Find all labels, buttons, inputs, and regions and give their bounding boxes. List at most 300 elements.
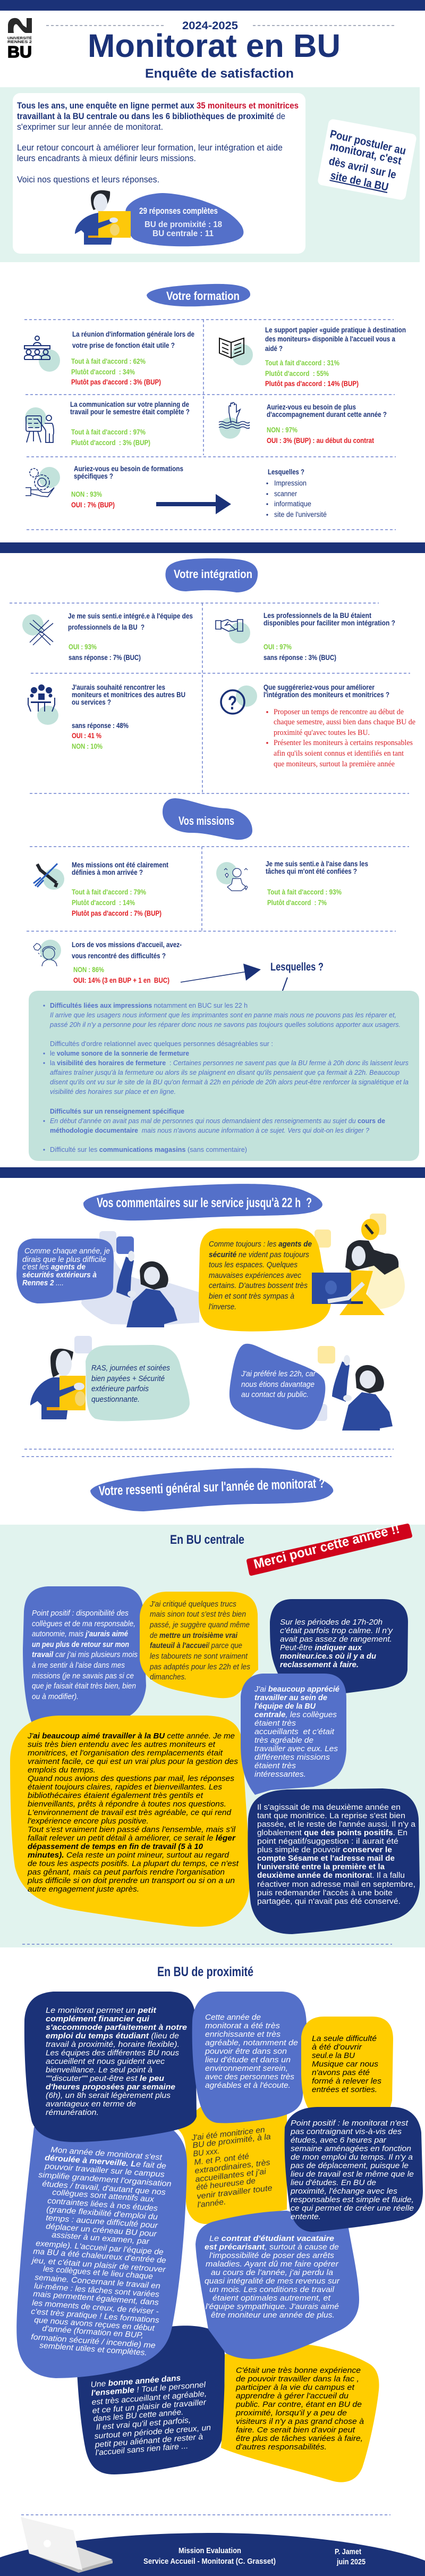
logo: Université Rennes 2 BU: RENNES 2 xyxy=(7,39,32,44)
question: à l'aise dans les tâches: Tout à fait d'accord : 93% xyxy=(267,888,342,896)
question: support papier: Tout à fait d'accord : 31% xyxy=(265,359,339,367)
question: rencontrer les autres moniteurs: J'aurais souhaité rencontrer les xyxy=(72,683,165,691)
comment: périodes 17h-20h: Sur les périodes de 17h-20h xyxy=(280,1618,382,1627)
comment: deuxième année: globalement que des points positifs . En xyxy=(257,1828,407,1837)
comment: très bonne expérience (yellow): proximité, lorsqu'il y a peu de xyxy=(235,2408,347,2418)
comment: BU xxx (yellow, tilted): BU de proximité, à la xyxy=(192,2132,271,2150)
comment: contrat précarisant (blue): étaient optimales autrement, et xyxy=(212,2294,331,2303)
comment: année à merveille (blue, tilted): les collègues et le lieu chaque xyxy=(43,2264,153,2281)
arrow: down to difficulties panel xyxy=(277,977,287,997)
illustration: man holding a yellow sheet xyxy=(30,1349,86,1419)
list: Lesquelles: Lesquelles ? xyxy=(268,468,304,476)
question: réunion d'information xyxy=(24,330,194,386)
comment: security agents (blue) xyxy=(16,1236,199,1327)
section heading: Votre intégration xyxy=(165,558,258,592)
section heading: Vos missions xyxy=(163,798,252,840)
comment: année à merveille (blue, tilted): lui-même : les tâches sont variées xyxy=(34,2281,160,2299)
question: accompagnement: OUI : 3% (BUP) : au début du contrat xyxy=(267,437,374,445)
icon: presenter at a board xyxy=(25,407,54,442)
question: suggestions: chaque semestre, aussi bien dans chaque BU de xyxy=(274,718,415,726)
comment: équipe de la BU centrale: étaient très xyxy=(254,1719,296,1728)
banner: Merci pour cette année: Merci pour cette année !! xyxy=(252,1521,401,1572)
comment: complément financier (navy): accueillent et nous guident avec xyxy=(46,2057,165,2066)
comment: année à merveille (blue, tilted): (grande flexibilité d'emploi du xyxy=(46,2205,158,2222)
comment: très bonne expérience (yellow): public. Par contre, étant en BU de xyxy=(235,2400,362,2409)
comment: année à merveille (blue, tilted): jeu, et c'était un plaisir de retrouver xyxy=(31,2256,166,2274)
comment: année à merveille (blue, tilted): assister à un examen, par xyxy=(52,2230,150,2246)
list: Lesquelles: scanner xyxy=(274,490,297,498)
question: missions définies: Plutôt d'accord : 14% xyxy=(72,899,135,907)
logo: Université Rennes 2 BU: BU xyxy=(7,43,32,61)
question: suggestions xyxy=(221,683,415,768)
icon: stacked hands xyxy=(22,614,53,645)
comment: contrat précarisant (blue): est précarisant , surtout à cause de xyxy=(205,2243,339,2252)
comment: bonne année dans l'ensemble (navy, tilted): est très accueillant et agréable, xyxy=(91,2389,207,2407)
comment: très bonne expérience (yellow): apprendre à gérer l'accueil du xyxy=(236,2391,349,2401)
comment: ouvrir seul.e la BU Musique (yellow): entrées et sorties. xyxy=(312,2085,377,2094)
comment: ouvrir seul.e la BU Musique (yellow): La seule difficulté xyxy=(312,2034,377,2043)
comment: complément financier (navy): complément financier qui xyxy=(46,2014,150,2023)
comment: très bonne expérience (yellow): de pouvoir travailler dans la fac , xyxy=(236,2374,359,2383)
comment: RAS (teal): extérieure parfois xyxy=(91,1385,149,1393)
comment: BU xxx (yellow, tilted): M. et P. ont été xyxy=(194,2152,250,2167)
comment: année à merveille (blue, tilted): semaine. Concernant le travail en xyxy=(35,2273,160,2291)
comment: troisième fauteuil: dimanches. xyxy=(150,1673,186,1682)
top bar xyxy=(0,0,425,11)
illustration: man holding a yellow sheet xyxy=(75,190,131,245)
panel: difficulties list: Difficultés d'ordre relationnel avec quelques personnes désagréables sur : xyxy=(50,1040,273,1048)
comment: disponibilité des collègues: Point positif : disponibilité des xyxy=(32,1609,129,1618)
comment: bonne année dans l'ensemble (navy, tilted): et ce fut un plaisir de travailler xyxy=(92,2398,207,2415)
comment: année enrichissante (blue): Cette année de xyxy=(205,2013,261,2022)
comment: deuxième année: l'université entre la première et la xyxy=(257,1862,385,1871)
question: à l'aise dans les tâches: Plutôt d'accord : 7% xyxy=(267,899,327,907)
comment: troisième fauteuil: passé, je suggère quand même xyxy=(149,1621,250,1629)
comment: périodes 17h-20h: Peut-être indiquer aux xyxy=(280,1643,362,1652)
illustration: waving woman xyxy=(332,1355,393,1431)
comment: équipe de la BU centrale xyxy=(241,1674,346,1795)
comment: disponibilité des collègues: à me sentir à l'aise dans mes xyxy=(32,1661,125,1670)
panel: difficulties list: En début d'année on avait pas mal de personnes qui nous demandaient des renseignements au sujet du cours de xyxy=(50,1117,385,1125)
section heading: Vos commentaires xyxy=(83,1184,322,1220)
panel: difficulties list: méthodologie documentaire mais nous n'avons aucune information à ce sujet. Vers qui doit-on les diriger ? xyxy=(50,1127,369,1134)
comment: année à merveille (blue, tilted) xyxy=(16,2127,187,2378)
question: missions définies: Mes missions ont été clairement xyxy=(72,861,168,869)
decorative squares around comments xyxy=(74,1214,386,1421)
comment: contrat précarisant (blue): quasi intégralité de mes revenus sur xyxy=(205,2277,340,2286)
comment: contrat précarisant (blue): l'impossibilité de poser des arrêts xyxy=(209,2251,335,2260)
section divider bar xyxy=(0,542,425,553)
intro text: travaillant à la BU centrale ou dans les 6 bibliothèques de proximité de xyxy=(17,111,285,121)
icon: raised hand above waves xyxy=(219,403,250,439)
question: missions définies: Plutôt pas d'accord : 7% (BUP) xyxy=(72,909,162,917)
question: communication planning: Tout à fait d'accord : 97% xyxy=(71,428,146,436)
question: rencontrer les autres moniteurs: ou services ? xyxy=(72,698,111,706)
subtitle: Enquête de satisfaction xyxy=(145,66,294,81)
question: intégration équipe: sans réponse : 7% (BUC) xyxy=(69,654,141,662)
question: communication planning xyxy=(25,400,190,447)
comment: J'ai beaucoup aimé travailler à la BU: plus difficile si on doit prendre un transport ou si on a un xyxy=(27,1876,235,1885)
question: support papier: Plutôt d'accord : 55% xyxy=(265,370,329,378)
arrow: towards Lesquelles xyxy=(181,964,261,982)
comment: security agents (yellow): Comme toujours : les agents de xyxy=(209,1240,312,1249)
question: réunion d'information: votre prise de fonction était utile ? xyxy=(72,341,175,349)
question: suggestions: que moniteurs, surtout la première année xyxy=(274,760,395,768)
comment: J'ai beaucoup aimé travailler à la BU: pas gênant, mais ca peut parfois rendre l'organisation xyxy=(27,1868,225,1877)
comment: préféré les 22h (blue): nous étions davantage xyxy=(241,1381,314,1389)
comment: J'ai beaucoup aimé travailler à la BU: dépassement de temps en fin de travail (5 à 10 xyxy=(28,1842,203,1851)
icon: wrench and fork xyxy=(33,864,64,890)
list: Lesquelles: Impression xyxy=(274,479,307,487)
question: support papier: des moniteurs» disponible à l'accueil vous a xyxy=(265,335,395,343)
callout: how to apply: site de la BU xyxy=(329,169,389,194)
panel: difficulties list: Il arrive que les usagers nous informent que les imprimantes sont en panne mais nous ne pouvons pas les réparer et, xyxy=(50,1011,396,1019)
question: réunion d'information: Tout à fait d'accord : 62% xyxy=(71,357,146,365)
comment: année à merveille (blue, tilted): déplacer un créneau BU pour xyxy=(46,2222,157,2239)
question: missions définies: définies à mon arrivée ? xyxy=(72,868,143,876)
question: intégration équipe: Je me suis senti.e intégré.e à l'équipe des xyxy=(68,612,193,620)
comment: J'ai beaucoup aimé travailler à la BU: minutes). Cela reste un point mineur, surtout au regard xyxy=(28,1851,230,1860)
comment: complément financier (navy): s'accommode parfaitement à notre xyxy=(46,2023,187,2032)
comment: J'ai beaucoup aimé travailler à la BU: de tous les aspects positifs. La plupart du temps, ce n'est xyxy=(28,1859,239,1868)
question: intégration équipe: OUI : 93% xyxy=(69,643,97,651)
comment: année à merveille (blue, tilted): que nous avons reçues en début xyxy=(34,2315,155,2333)
comment: complément financier (navy): Le monitorat permet un petit xyxy=(46,2006,157,2015)
callout: 29 responses: BU centrale : 11 xyxy=(152,229,214,238)
question: rencontrer les autres moniteurs: moniteurs et monitrices des autres BU xyxy=(72,691,185,699)
comment: bonne année dans l'ensemble (navy, tilted): dans les BU cette année. xyxy=(93,2407,184,2423)
comment: deuxième année: réactiver mon adresse mail en septembre, xyxy=(257,1880,415,1889)
icon: confused person xyxy=(33,940,61,966)
comment: périodes 17h-20h: moniteur.ice.s où il y a du xyxy=(280,1652,376,1661)
panel: difficulties list: affaires traîner jusqu'à la fermeture ou alors ils se plaignent en disant qu'ils pensaient que ça fermait à 22h. Beaucoup xyxy=(50,1069,400,1076)
question: accompagnement xyxy=(219,403,387,445)
panel: difficulties list: Difficultés liées aux impressions notamment en BUC sur les 22 h xyxy=(50,1002,248,1009)
intro card xyxy=(13,93,305,254)
comment: security agents (blue): sécurités extérieurs à xyxy=(22,1271,97,1279)
question: suggestions: Proposer un temps de rencontre au début de xyxy=(274,708,404,716)
callout: 29 responses: 29 réponses complètes xyxy=(139,206,218,216)
callout: how to apply: Pour postuler au xyxy=(329,128,407,157)
comment: année enrichissante (blue): pouvoir être dans son xyxy=(205,2047,287,2056)
comment: point positif études (navy): proximité, l'échange avec les xyxy=(290,2187,398,2196)
comment: disponibilité des collègues xyxy=(23,1586,146,1723)
question: difficultés d'accueil: NON : 86% xyxy=(73,966,104,974)
comment: complément financier (navy) xyxy=(24,1992,197,2142)
section divider bar xyxy=(0,1167,425,1178)
section heading: Votre intégration: Votre intégration xyxy=(174,567,252,581)
comment: complément financier (navy): avantageux en terme de xyxy=(46,2100,136,2109)
comment: point positif études (navy): semaine aménagées en fonction xyxy=(291,2144,411,2153)
comment: RAS (teal): bien payées + Sécurité xyxy=(91,1375,165,1383)
callout: 29 responses: BU de promixité : 18 xyxy=(144,220,222,229)
comment: année à merveille (blue, tilted): études / travail, d'autant que nos xyxy=(42,2179,166,2197)
comment: J'ai beaucoup aimé travailler à la BU: emplois du temps. xyxy=(28,1766,96,1775)
comment: bonne année dans l'ensemble (navy, tilted): petit peu aliénant de rester à xyxy=(94,2432,203,2449)
list: Lesquelles: informatique xyxy=(274,500,311,508)
comment: année à merveille (blue, tilted): les moments de creux, de réviser - xyxy=(32,2298,159,2316)
comment: équipe de la BU centrale: intéressantes. xyxy=(254,1770,306,1779)
comment: équipe de la BU centrale: centrale, les collègues xyxy=(254,1710,337,1719)
comment: préféré les 22h (blue): J'ai préféré les 22h, car xyxy=(241,1370,316,1378)
comment: J'ai beaucoup aimé travailler à la BU: Quand nous avions des questions par mail, les réponses xyxy=(28,1774,235,1783)
panel: difficulties list: le volume sonore de la sonnerie de fermeture xyxy=(50,1050,189,1057)
comment: complément financier (navy): (6h), un 8h serait légèrement plus xyxy=(46,2091,171,2100)
comment: bonne année dans l'ensemble (navy, tilted): surtout en période de creux, un xyxy=(94,2423,211,2441)
comment: J'ai beaucoup aimé travailler à la BU: suis très bien entendu avec les autres moniteurs et xyxy=(28,1740,216,1749)
comment: contrat précarisant (blue): l'équipe sympathique. J'aurais aimé xyxy=(206,2302,339,2311)
comment: année enrichissante (blue): environnement serein, xyxy=(205,2064,288,2073)
comment: ouvrir seul.e la BU Musique (yellow): seul.e la BU xyxy=(312,2051,355,2060)
comment: BU xxx (yellow, tilted): l'année. xyxy=(197,2197,226,2210)
comment: BU xxx (yellow, tilted): J'ai été monitrice en xyxy=(190,2125,266,2143)
footer credits xyxy=(143,2547,366,2566)
question: rencontrer les autres moniteurs xyxy=(28,683,185,750)
intro text: Voici nos questions et leurs réponses. xyxy=(17,174,159,185)
comment: J'ai beaucoup aimé travailler à la BU: fallait relever un petit détail à améliorer, ce serait le léger xyxy=(28,1834,236,1843)
comment: deuxième année: compte Sésame et l'adresse mail de xyxy=(257,1854,395,1863)
question: suggestions: Présenter les moniteurs à certains responsables xyxy=(274,739,413,747)
comment: point positif études (navy): entente. xyxy=(291,2212,321,2221)
comment: J'ai beaucoup aimé travailler à la BU: l'expérience encore plus positive. xyxy=(28,1817,149,1826)
comment: ouvrir seul.e la BU Musique (yellow) xyxy=(301,2017,393,2117)
comment: troisième fauteuil: mais sinon tout s'est très bien xyxy=(150,1610,246,1619)
comment: préféré les 22h (blue): au contact du public. xyxy=(241,1391,309,1399)
comment: troisième fauteuil: de mettre un troisième vrai xyxy=(150,1632,238,1640)
icon: question mark: ? xyxy=(228,692,237,714)
comment: année enrichissante (blue): monitorat a été très xyxy=(205,2021,280,2030)
list: Lesquelles: site de l'université xyxy=(274,511,327,518)
panel: difficulties list: Difficultés sur un renseignement spécifique xyxy=(50,1108,184,1115)
question: accompagnement: NON : 97% xyxy=(267,426,298,434)
comment: BU xxx (yellow, tilted): BU xxx. xyxy=(193,2146,220,2159)
comment: deuxième année: partagée, qui n'avait pas été conservé. xyxy=(257,1897,401,1906)
comment: J'ai beaucoup aimé travailler à la BU: étaient toujours claires, rapides et bienveillantes. Les xyxy=(28,1783,223,1792)
callout: how to apply xyxy=(317,119,417,200)
comment: année à merveille (blue, tilted): mais permettent également, dans xyxy=(33,2289,159,2307)
comment: ouvrir seul.e la BU Musique (yellow): à été d'ouvrir xyxy=(312,2043,362,2052)
comment: J'ai beaucoup aimé travailler à la BU: monitrices, et l'organisation des remplacements était xyxy=(28,1749,223,1758)
comment: très bonne expérience (yellow): visiteurs il n'y a pas grand chose à xyxy=(236,2417,364,2426)
comment: J'ai beaucoup aimé travailler à la BU: J'ai beaucoup aimé travailler à la BU cette année. Je me xyxy=(27,1732,235,1741)
comment: security agents (yellow): mauvaises expériences avec xyxy=(209,1272,302,1280)
comment: équipe de la BU centrale: J'ai beaucoup apprécié xyxy=(254,1685,339,1694)
comment: année à merveille (blue, tilted): pouvoir travailler sur le campus xyxy=(44,2162,165,2179)
comment: deuxième année: passée, et le reste de l'année aussi. Il n'y a xyxy=(257,1820,416,1829)
icon: meeting xyxy=(24,336,60,372)
comment: point positif études (navy): études, avec 6 heures par xyxy=(291,2136,387,2145)
comment: équipe de la BU centrale: très agréable de xyxy=(254,1736,313,1745)
panel: difficulties list: visibilité des horaires sur place et en ligne. xyxy=(50,1088,176,1095)
icon: open book xyxy=(219,338,253,365)
question: support papier: Le support papier «guide pratique à destination xyxy=(265,326,406,334)
comment: security agents (yellow): certains. D'autres bossent très xyxy=(209,1282,308,1290)
footer credits: Mission Evaluation xyxy=(178,2547,241,2555)
comment: équipe de la BU centrale: étaient très xyxy=(254,1761,296,1770)
section heading: Vos missions: Vos missions xyxy=(178,814,234,827)
comment: disponibilité des collègues: collègues et de ma responsable, xyxy=(32,1620,135,1628)
comment: équipe de la BU centrale: travailler au sein de xyxy=(254,1693,327,1702)
comment: BU xxx (yellow, tilted): accueillantes et j'ai xyxy=(195,2167,267,2184)
comment: point positif études (navy): ce qui permet de créer une réelle xyxy=(291,2204,414,2213)
icon: open laptop xyxy=(21,2517,113,2573)
comment: security agents (yellow) xyxy=(199,1228,405,1332)
callout: how to apply: monitorat, c'est xyxy=(329,140,403,167)
comment: contrat précarisant (blue): au cours de l'année, j'ai perdu la xyxy=(211,2268,333,2277)
question: suggestions: afin qu'ils soient connus et identifiés en tant xyxy=(274,749,404,758)
comment: année à merveille (blue, tilted): ma BU a été chaleureux d'entrée de xyxy=(33,2247,166,2265)
question: rencontrer les autres moniteurs: NON : 10% xyxy=(72,742,103,750)
question: formations spécifiques: spécifiques ? xyxy=(74,472,113,480)
logo: Université Rennes 2 BU: UNIVERSITÉ xyxy=(7,36,32,40)
comment: troisième fauteuil: J'ai critiqué quelques trucs xyxy=(149,1600,236,1609)
question: support papier: aidé ? xyxy=(265,345,283,353)
comment: très bonne expérience (yellow): participer à la vie du campus et xyxy=(235,2383,355,2392)
question: réunion d'information: Plutôt d'accord : 34% xyxy=(71,368,135,376)
comment: security agents (blue): dirais que le plus difficile xyxy=(22,1256,106,1264)
comment: très bonne expérience (yellow): C'était une très bonne expérience xyxy=(236,2366,361,2375)
comment: J'ai beaucoup aimé travailler à la BU: L'environnement de travail est très agréable, ce qui rend xyxy=(28,1808,232,1817)
comment: troisième fauteuil: pas adaptés pour les 22h et les xyxy=(149,1663,250,1671)
comment: très bonne expérience (yellow) xyxy=(221,2344,379,2482)
comment: année enrichissante (blue): lieu d'étude et dans un xyxy=(205,2055,291,2064)
comment: bonne année dans l'ensemble (navy, tilted): l'ensemble ! Tout le personnel xyxy=(91,2380,206,2398)
comment: deuxième année: puis redemander l'accès à une boite xyxy=(257,1888,393,1897)
question: intégration équipe xyxy=(22,612,193,662)
header year with dashed rules: 2024-2025 xyxy=(182,20,238,32)
comment: préféré les 22h (blue) xyxy=(230,1344,393,1431)
comment: ouvrir seul.e la BU Musique (yellow): Musique car nous xyxy=(312,2060,379,2069)
question: professionnels disponibles xyxy=(216,612,395,662)
comment: contrat précarisant (blue): maladies. Ayant dû me faire opérer xyxy=(206,2260,339,2269)
section heading: Votre ressenti xyxy=(90,1468,333,1511)
comment: point positif études (navy): pas contraignant vis-à-vis des xyxy=(290,2127,402,2136)
comment: disponibilité des collègues: un peu plus de retour sur mon xyxy=(32,1641,129,1649)
comment: security agents (blue): c'est les agents de xyxy=(22,1263,86,1272)
comment: contrat précarisant (blue): être moniteur une année de plus. xyxy=(211,2311,335,2320)
comment: équipe de la BU centrale: différentes missions xyxy=(254,1753,330,1762)
comment: point positif études (navy): lieu de travail est le même que le xyxy=(291,2170,414,2179)
question: intégration équipe: professionnels de la BU ? xyxy=(68,623,144,631)
question: suggestions: Que suggéreriez-vous pour améliorer xyxy=(264,683,375,691)
comment: J'ai beaucoup aimé travailler à la BU: bibliothécaires étaient également très gentils et xyxy=(28,1791,203,1800)
comment: année à merveille (blue, tilted): formation sécurité / incendie) me xyxy=(31,2332,156,2350)
icon: pen in yellow bubble xyxy=(361,1219,379,1240)
icon: handshake xyxy=(216,620,250,643)
question: formations spécifiques: Auriez-vous eu besoin de formations xyxy=(74,465,183,473)
comment: année enrichissante (blue): avec des personnes très xyxy=(205,2072,295,2081)
comment: RAS (teal) xyxy=(30,1345,190,1421)
question: missions définies: Tout à fait d'accord : 79% xyxy=(72,888,146,896)
comment: périodes 17h-20h: avait pas assez de rangement. xyxy=(280,1635,392,1644)
comment: ouvrir seul.e la BU Musique (yellow): n'avons pas été xyxy=(312,2068,370,2077)
question: accompagnement: Auriez-vous eu besoin de plus xyxy=(267,403,356,411)
comment: point positif études (navy): pas de déplacement, puisque le xyxy=(290,2161,409,2170)
comment: deuxième année: deuxième année de monitora t. Il a fallu xyxy=(257,1871,405,1880)
comment: complément financier (navy): d'heures proposées par semaine xyxy=(46,2082,175,2092)
comment: point positif études (navy): lieu d'études. En BU de xyxy=(291,2178,376,2187)
question: professionnels disponibles: OUI : 97% xyxy=(264,643,292,651)
comment: année enrichissante (blue): enrichissante et très xyxy=(205,2030,281,2039)
question: difficultés d'accueil: vous rencontré des difficultés ? xyxy=(72,952,166,960)
intro text xyxy=(17,101,299,185)
panel: difficulties list xyxy=(29,991,419,1161)
question: à l'aise dans les tâches: tâches qui m'ont été confiées ? xyxy=(266,867,357,875)
comment: bonne année dans l'ensemble (navy, tilted) xyxy=(77,2326,225,2474)
comment: troisième fauteuil: les tabourets ne sont vraiment xyxy=(150,1652,248,1661)
question: rencontrer les autres moniteurs: OUI : 41 % xyxy=(72,732,101,740)
icon: gears above a hand xyxy=(26,467,60,497)
comment: contrat précarisant (blue): un mois. Les conditions de travail xyxy=(209,2285,335,2294)
question: communication planning: travail pour le semestre était complète ? xyxy=(70,408,190,416)
question: difficultés d'accueil xyxy=(33,940,182,984)
comment: année à merveille (blue, tilted): collègues sont attentifs aux xyxy=(52,2188,155,2204)
comment: point positif études (navy): de mon emploi du temps. Il n'y a xyxy=(291,2153,413,2162)
callout: how to apply: dès avril sur le xyxy=(328,155,397,181)
comment: complément financier (navy): Les équipes des différentes BU nous xyxy=(46,2048,180,2058)
comment: deuxième année: tant que monitrice. La reprise s'est bien xyxy=(257,1811,405,1820)
question: formations spécifiques: OUI : 7% (BUP) xyxy=(71,501,115,509)
comment: disponibilité des collègues: ou à modifier). xyxy=(32,1693,79,1701)
comment: BU xxx (yellow, tilted) xyxy=(175,2106,287,2224)
callout: 29 responses xyxy=(125,193,243,246)
comment: security agents (yellow): tous les espaces. Quelques xyxy=(209,1261,298,1269)
question: suggestions: l'intégration des moniteurs et monitrices ? xyxy=(264,691,389,699)
section heading: Votre formation: Votre formation xyxy=(166,289,240,303)
comment: année à merveille (blue, tilted): c'est très pratique ! Les formations xyxy=(31,2307,160,2325)
comment: disponibilité des collègues: que je faisait était très bien, bien xyxy=(32,1682,136,1691)
question: à l'aise dans les tâches: Je me suis senti.e à l'aise dans les xyxy=(266,860,368,868)
comment: année à merveille (blue, tilted): d'année (formation en BUP, xyxy=(42,2324,143,2340)
intro text: s'exprimer sur leur année de monitorat. xyxy=(17,122,163,132)
panel: BU centrale xyxy=(0,1521,425,1947)
intro text: leurs encadrants à mieux définir leurs missions. xyxy=(17,153,196,163)
logo: Université Rennes 2 BU xyxy=(7,18,32,61)
illustration: woman with laptop xyxy=(312,1240,405,1315)
comment: année à merveille (blue, tilted): exemple). L'accueil par l'équipe de xyxy=(36,2239,164,2257)
comment: année enrichissante (blue): agréables et à l'écoute. xyxy=(205,2081,291,2090)
comment: année à merveille (blue, tilted): contraintes liées à nos études xyxy=(47,2196,158,2213)
illustration: waving woman xyxy=(116,1251,177,1327)
comment: J'ai beaucoup aimé travailler à la BU xyxy=(10,1716,250,1927)
comment: point positif études (navy): responsables est simple et fluide, xyxy=(291,2195,414,2204)
section heading: Vos commentaires: Vos commentaires sur le service jusqu'à 22 h ? xyxy=(97,1195,312,1210)
question: rencontrer les autres moniteurs: sans réponse : 48% xyxy=(72,722,129,730)
comment: deuxième année: plus simple de pouvoir conserver le xyxy=(257,1845,392,1854)
comment: année à merveille (blue, tilted): semblent utiles et complètes. xyxy=(39,2341,147,2357)
question: difficultés d'accueil: OUI: 14% (3 en BUP + 1 en BUC) xyxy=(73,976,169,984)
comment: deuxième année xyxy=(248,1788,420,1934)
comment: complément financier (navy): rémunération. xyxy=(46,2108,99,2117)
comment: point positif études (navy): Point positif : le monitorat n'est xyxy=(291,2119,409,2128)
comment: deuxième année: Il s'agissait de ma deuxième année en xyxy=(257,1803,401,1812)
question: professionnels disponibles: Les professionnels de la BU étaient xyxy=(264,612,371,620)
comment: J'ai beaucoup aimé travailler à la BU: vraiment facile, ce qui est un vrai plus pour la gestion des xyxy=(28,1757,239,1766)
question: communication planning: La communication sur votre planning de xyxy=(70,400,189,408)
comment: BU xxx (yellow, tilted): venir travailler toute xyxy=(197,2184,273,2201)
question: support papier: Plutôt pas d'accord : 14% (BUP) xyxy=(265,380,359,388)
panel: introduction xyxy=(0,87,420,262)
question: réunion d'information: La réunion d'information générale lors de xyxy=(72,330,194,338)
comment: troisième fauteuil: fauteuil à l'accueil parce que xyxy=(150,1642,242,1650)
comment: RAS (teal): RAS, journées et soirées xyxy=(91,1364,170,1373)
comment: périodes 17h-20h xyxy=(270,1599,408,1695)
icon: serene person xyxy=(216,862,248,891)
comment: contrat précarisant (blue) xyxy=(196,2211,359,2359)
heading: Lesquelles: Lesquelles ? xyxy=(270,961,324,973)
heading: En BU centrale: En BU centrale xyxy=(170,1533,244,1547)
comment: très bonne expérience (yellow): d'autres responsabilités. xyxy=(236,2443,327,2452)
